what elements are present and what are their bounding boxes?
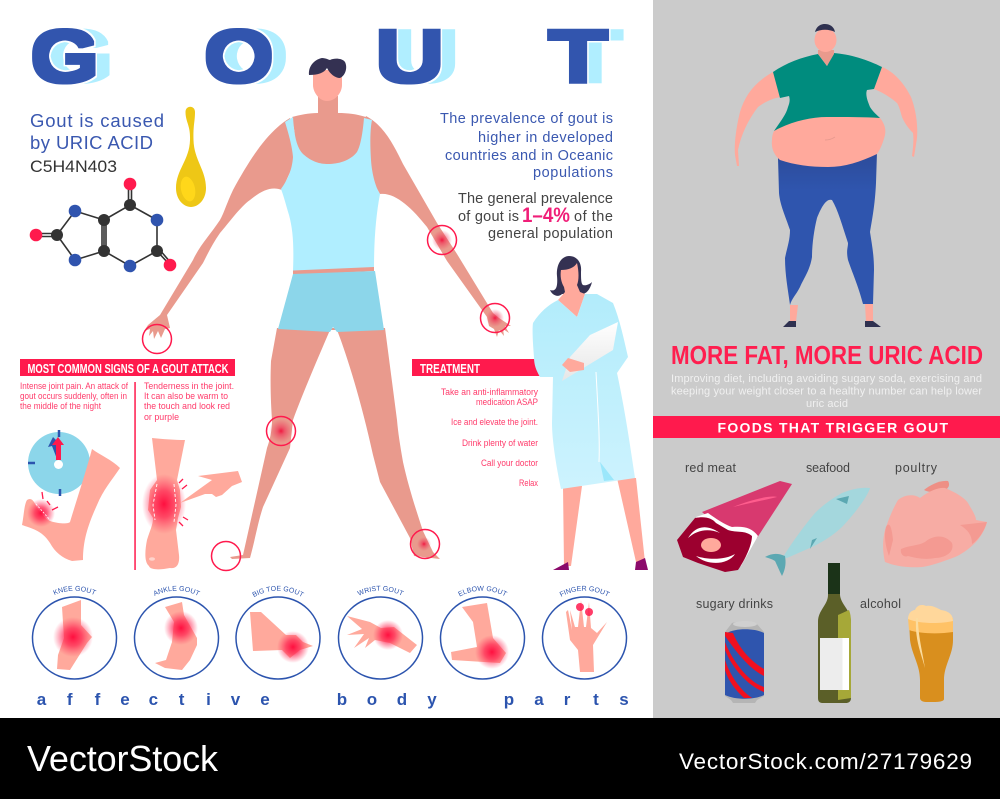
icon: chicken xyxy=(883,481,987,567)
icon: beer glass xyxy=(908,605,953,702)
doctor: clipboard xyxy=(562,322,618,381)
text: prevalence of gout xyxy=(440,111,613,181)
fat man: neck xyxy=(818,50,834,66)
text: general prevalence 1-4%: of gout is xyxy=(458,209,519,225)
figure: overweight man xyxy=(735,24,917,327)
caption: affective body parts: body xyxy=(337,690,437,709)
label: red meat: red meat xyxy=(685,461,737,475)
text: improving diet: uric acid xyxy=(806,398,848,410)
heading bar: treatment: TREATMENT xyxy=(420,361,480,376)
circle: finger gout: FINGER GOUT xyxy=(560,586,610,597)
doctor: coat xyxy=(533,294,635,489)
text: general prevalence 1-4%: 1–4% xyxy=(522,204,570,227)
list: treatment steps: Take an anti-inflammatory xyxy=(441,387,538,397)
markers: affected joints on body xyxy=(142,226,510,570)
circle: ankle gout xyxy=(134,586,220,680)
illustration: foot with toe pain xyxy=(22,449,120,561)
text: tenderness in the joint: or purple xyxy=(144,412,179,423)
man: legs xyxy=(230,328,440,559)
list: treatment steps: Drink plenty of water xyxy=(462,438,538,448)
title: GOUT: U xyxy=(375,16,444,98)
icon: wine bottle xyxy=(818,563,851,703)
circle: elbow gout: ELBOW GOUT xyxy=(458,586,508,596)
man: neck and chest xyxy=(292,96,366,165)
circle: elbow gout xyxy=(440,586,526,680)
illustration: swollen ankle xyxy=(142,438,188,569)
text: improving diet xyxy=(671,373,982,410)
label: seafood: seafood xyxy=(806,461,850,475)
icon: yellow drop xyxy=(176,107,206,207)
icon: soda can xyxy=(725,621,764,703)
man: waistband xyxy=(293,267,374,275)
heading bar: foods that trigger gout xyxy=(653,416,1000,438)
text: prevalence of gout: higher in developed xyxy=(478,130,613,146)
text: intense joint pain: the middle of the night xyxy=(20,401,101,412)
circle: wrist gout xyxy=(338,586,424,680)
fat man: t-shirt xyxy=(773,53,882,131)
text: gout is caused by uric acid: by URIC ACID xyxy=(30,132,153,153)
label: alcohol: alcohol xyxy=(860,597,901,611)
fat man: hair xyxy=(815,24,835,32)
man: head xyxy=(313,70,342,101)
heading bar: foods that trigger gout: FOODS THAT TRIGGER GOUT xyxy=(718,420,948,436)
title: GOUT: T xyxy=(563,16,623,98)
title: GOUT: G xyxy=(30,16,99,98)
circle: big toe gout: BIG TOE GOUT xyxy=(252,586,304,597)
list: treatment steps: Ice and elevate the joint. xyxy=(451,417,538,427)
text: tenderness in the joint xyxy=(144,381,234,423)
title: GOUT: T xyxy=(548,16,608,98)
heading bar: most common signs: MOST COMMON SIGNS OF A GOUT ATTACK xyxy=(28,361,229,376)
heading bar: treatment xyxy=(412,359,542,376)
title: GOUT: T xyxy=(548,16,608,98)
text: tenderness in the joint: It can also be warm to xyxy=(144,391,228,402)
text: tenderness in the joint: Tenderness in the joint. xyxy=(144,381,234,392)
divider xyxy=(134,382,136,570)
panel: footer band xyxy=(0,718,1000,799)
circle: knee gout: KNEE GOUT xyxy=(53,586,96,595)
text: general prevalence 1-4% xyxy=(458,191,613,242)
figure: standing man xyxy=(144,58,511,559)
caption: affective body parts: parts xyxy=(504,690,629,709)
fat man: trousers xyxy=(778,152,877,305)
doctor: shoes xyxy=(553,558,648,570)
text: footer url: VectorStock.com/27179629 xyxy=(679,749,972,774)
man: shorts xyxy=(278,271,384,332)
fat man: belly xyxy=(772,117,885,167)
circle: big toe gout xyxy=(235,586,321,680)
title: GOUT: O xyxy=(204,16,274,98)
fat man: head xyxy=(814,28,836,52)
list: treatment steps: medication ASAP xyxy=(476,397,538,407)
title: GOUT: G xyxy=(45,16,113,98)
panel: right grey background xyxy=(653,0,1000,718)
label: poultry: poultry xyxy=(895,461,938,475)
icon: red meat xyxy=(677,481,792,572)
text: general prevalence 1-4%: general population xyxy=(488,226,613,242)
caption: affective body parts: affective xyxy=(37,690,270,709)
text: prevalence of gout: populations xyxy=(533,165,613,181)
text: intense joint pain xyxy=(20,381,128,412)
man: right arm xyxy=(355,116,511,337)
text: improving diet: keeping your weight closer to a healthy number can help lower xyxy=(671,386,982,398)
title: GOUT xyxy=(30,16,623,98)
title: GOUT: U xyxy=(375,16,444,98)
text: intense joint pain: gout occurs suddenly, often in xyxy=(20,391,127,402)
doctor: face and neck xyxy=(558,263,585,317)
text: intense joint pain: Intense joint pain. An attack of xyxy=(20,381,128,392)
list: treatment steps: Relax xyxy=(519,478,538,488)
man: tank top xyxy=(281,117,380,271)
text: tenderness in the joint: the touch and look red xyxy=(144,401,230,412)
icon: uric acid molecule xyxy=(30,178,176,272)
caption: affective body parts xyxy=(37,690,629,709)
fat man: shoes and ankles xyxy=(790,304,873,322)
text: gout is caused by uric acid: C5H4N403 xyxy=(30,157,117,176)
text: footer logo: VectorStock xyxy=(27,738,219,779)
text: prevalence of gout: countries and in Oceanic xyxy=(445,148,613,164)
doctor: hand xyxy=(562,358,584,372)
icon: fish xyxy=(765,488,870,576)
text: general prevalence 1-4%: The general prevalence xyxy=(458,191,613,207)
text: prevalence of gout: The prevalence of gout is xyxy=(440,111,613,127)
figure: doctor xyxy=(533,256,648,570)
title: GOUT: O xyxy=(204,16,274,98)
label: sugary drinks: sugary drinks xyxy=(696,597,773,611)
man: left arm xyxy=(144,118,300,339)
doctor: hair xyxy=(550,256,592,296)
text: general prevalence 1-4%: of the xyxy=(574,209,613,225)
list: treatment steps xyxy=(441,387,538,488)
title: GOUT: G xyxy=(30,16,99,98)
text: gout is caused by uric acid: Gout is caused xyxy=(30,110,164,131)
doctor: legs xyxy=(563,478,645,566)
man: hair xyxy=(309,58,346,78)
fat man: left arm xyxy=(735,72,781,166)
list: treatment steps: Call your doctor xyxy=(481,458,538,468)
circle: finger gout xyxy=(542,586,628,680)
heading bar: most common signs xyxy=(20,359,235,376)
title: GOUT: O xyxy=(218,16,288,98)
text: gout is caused by uric acid xyxy=(30,110,164,176)
text: improving diet: Improving diet, including avoiding sugary soda, exercising and xyxy=(671,373,982,385)
icon: clock xyxy=(28,430,90,496)
fat man: right arm xyxy=(874,67,917,157)
circle: knee gout xyxy=(32,586,118,680)
circle: ankle gout: ANKLE GOUT xyxy=(154,586,200,596)
title: GOUT: U xyxy=(390,16,459,98)
icon: pointing hand xyxy=(180,471,242,503)
circle: wrist gout: WRIST GOUT xyxy=(357,586,404,596)
